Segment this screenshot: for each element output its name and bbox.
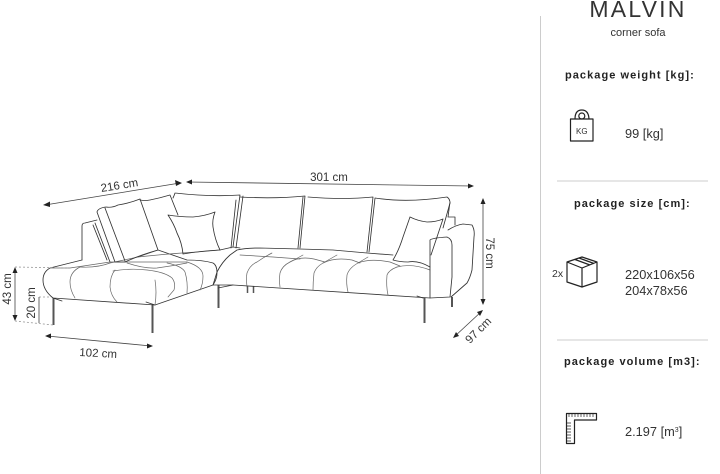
dimension: 301 cm: 301 cm (310, 172, 348, 184)
heading: package size: package size [cm]: (574, 198, 691, 210)
dimension: 20 cm: 20 cm (26, 287, 38, 319)
dimension: 43 cm (2, 267, 68, 325)
left armrest back (82, 220, 110, 262)
main sofa seat outline (213, 248, 393, 285)
value: size (625, 267, 695, 298)
chaise seat seams (50, 262, 187, 268)
value: volume: ] (679, 424, 682, 439)
sofa line drawing (43, 193, 474, 333)
sofa legs (54, 285, 452, 333)
left throw pillow (168, 212, 220, 254)
dimension: 75 cm (480, 198, 495, 305)
icon: box (567, 257, 597, 287)
dimension: 301 cm (186, 172, 474, 188)
main seat seams (240, 255, 300, 259)
left back cushions (97, 199, 158, 262)
rear frame stub (448, 202, 455, 225)
dimension: 20 cm (26, 287, 50, 323)
right throw pillow (393, 217, 443, 267)
dimension: 97 cm: 97 cm (464, 316, 494, 346)
leg struts (53, 285, 423, 305)
value: volume: 2.197 [m (625, 424, 675, 439)
value: size: 220x106x56 (625, 267, 695, 282)
dimension: 75 cm: 75 cm (483, 237, 495, 269)
icon: ruler (566, 414, 596, 444)
chaise seat outline (43, 250, 217, 305)
corner back cushion (173, 193, 240, 250)
icon: weight (570, 110, 593, 141)
right armrest (430, 224, 474, 298)
value: size: 204x78x56 (625, 283, 688, 298)
label: quantity: 2x (552, 268, 564, 280)
icon: weight: KG (576, 127, 588, 136)
value: volume: 3 (675, 427, 679, 434)
dimension: 97 cm (453, 310, 494, 346)
dimension: 102 cm (45, 334, 153, 361)
dimension: 216 cm: 216 cm (100, 177, 139, 195)
dimension: 216 cm (43, 177, 182, 207)
back cushions (236, 196, 450, 252)
dimension: 102 cm: 102 cm (79, 347, 117, 361)
subtitle: corner sofa (610, 27, 666, 39)
heading: package volume: package volume [m3]: (564, 356, 701, 368)
value: weight: 99 [kg] (625, 126, 663, 141)
heading: package weight: package weight [kg]: (565, 70, 695, 82)
dimension: 43 cm: 43 cm (2, 273, 14, 305)
